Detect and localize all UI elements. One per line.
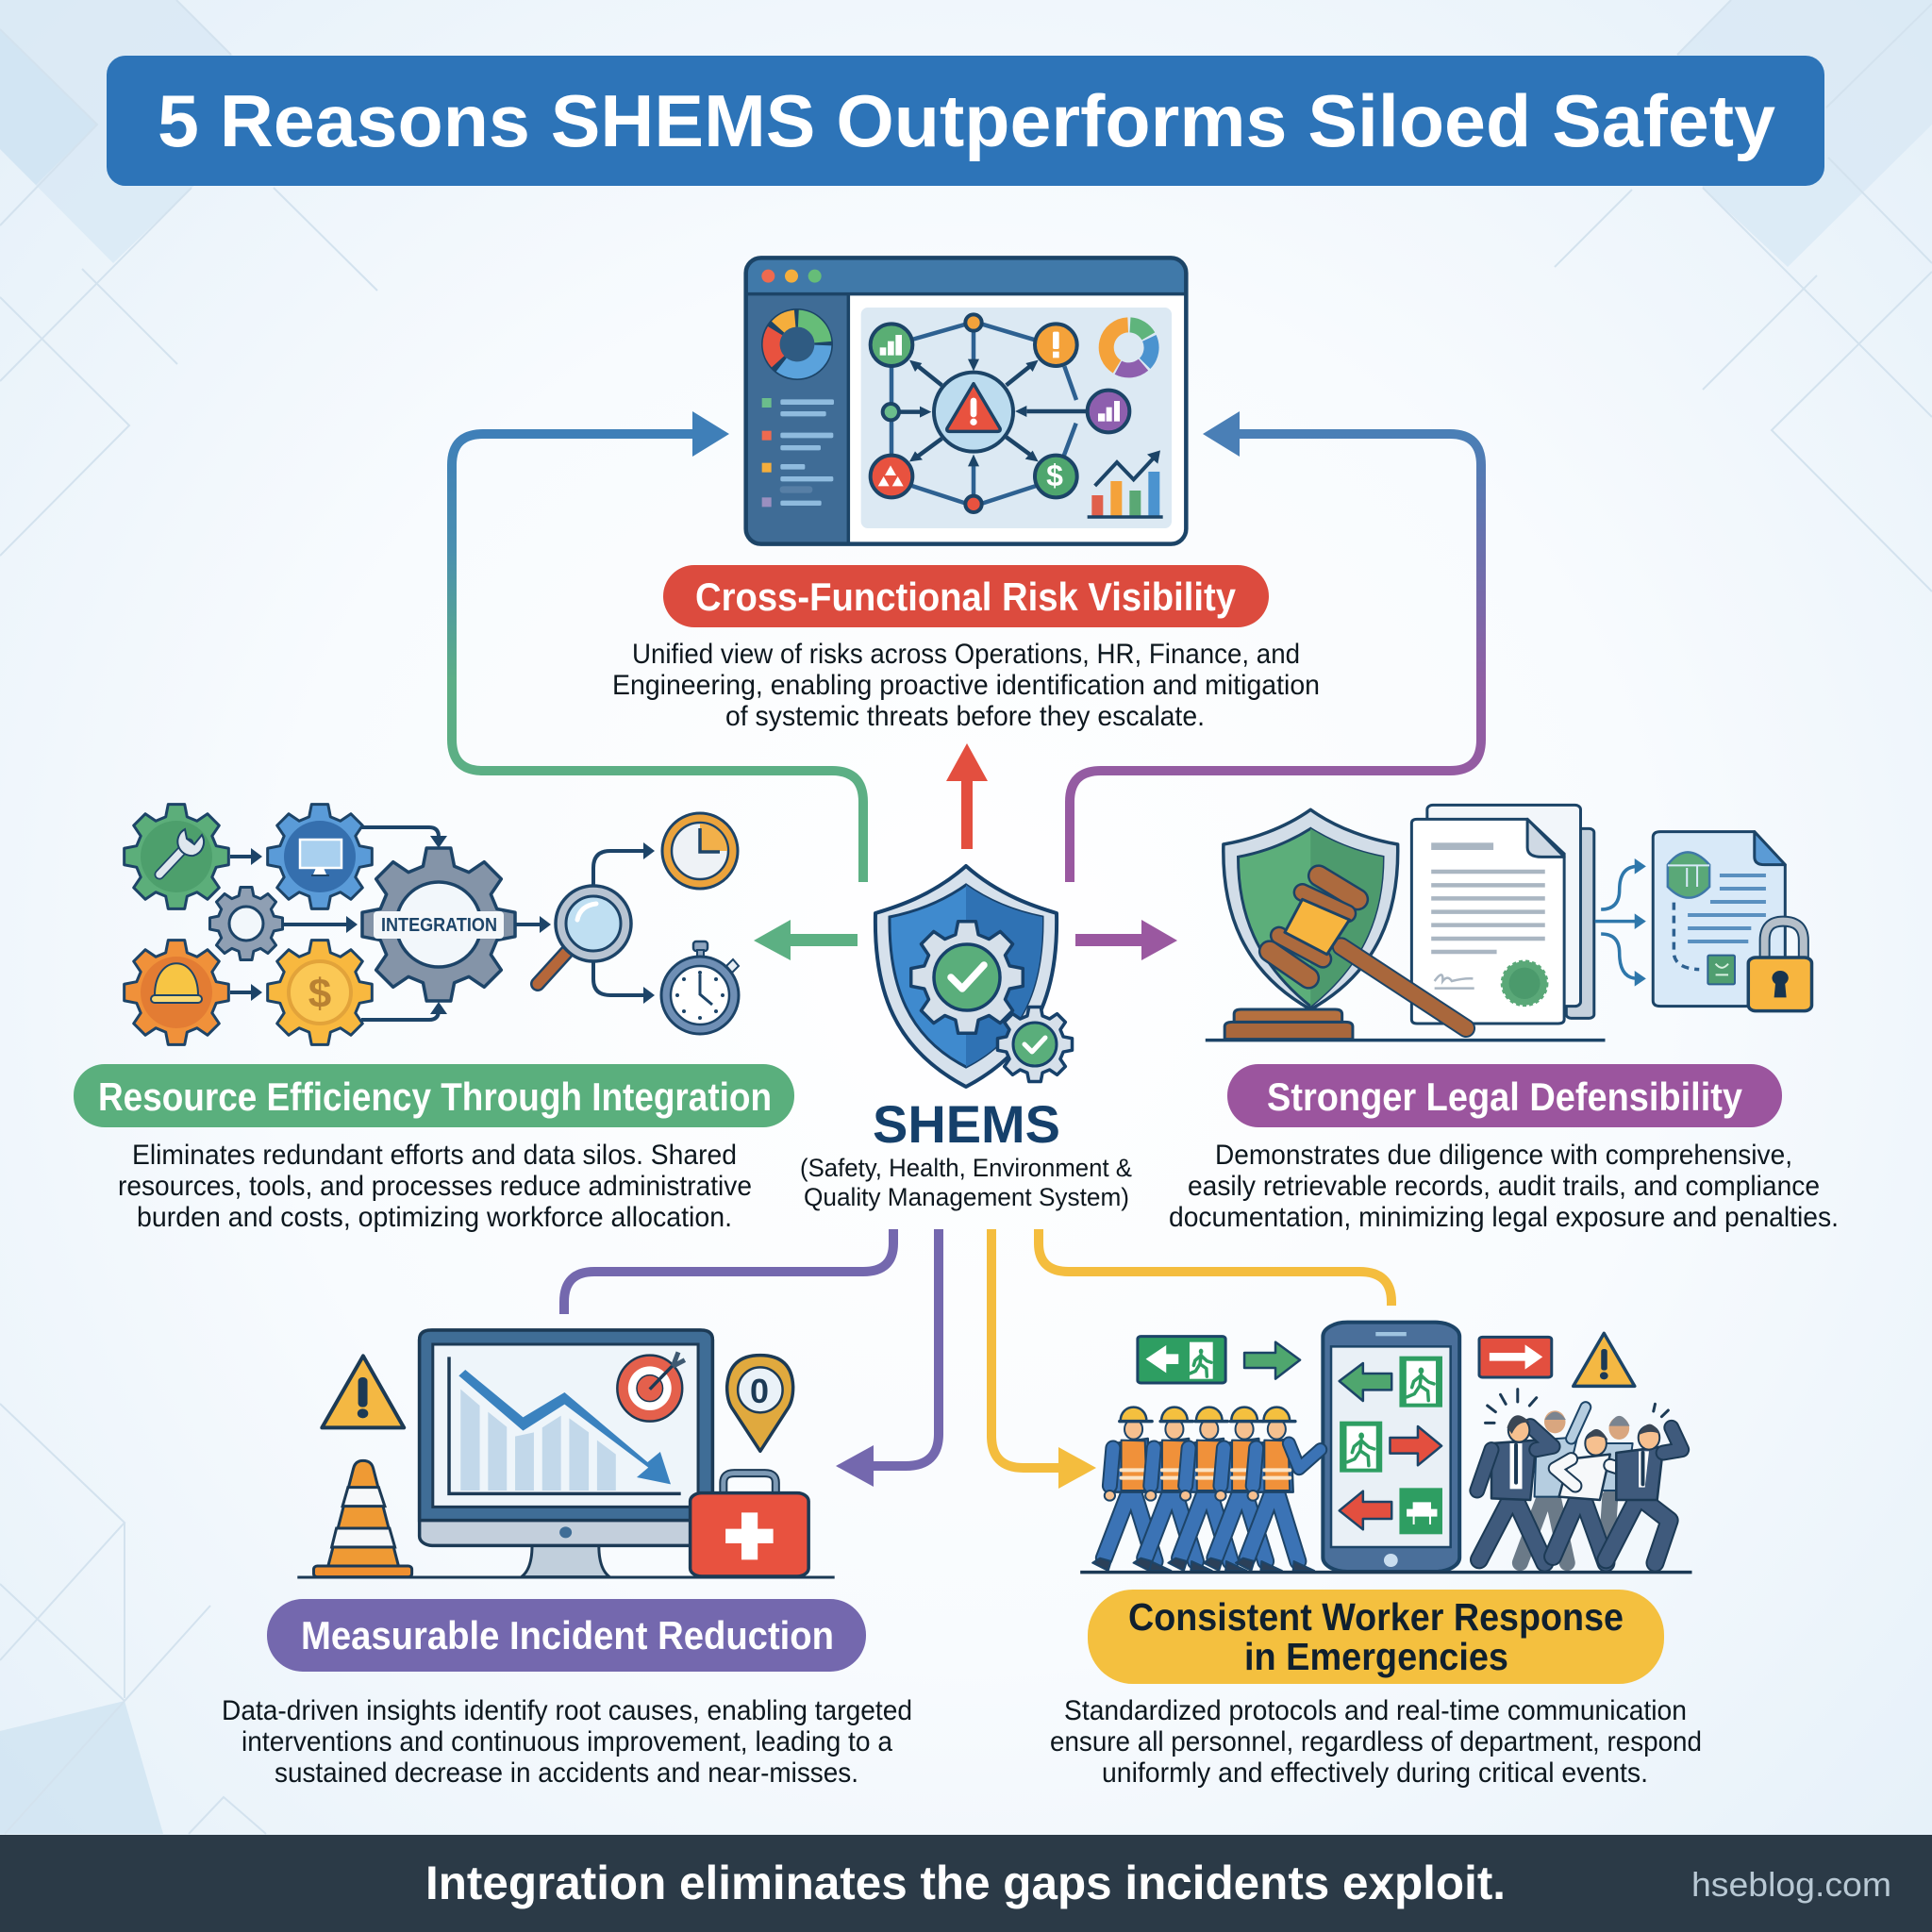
- text: SHEMS definition: (Safety, Health, Environment &: [800, 1154, 1132, 1182]
- chart: [449, 1357, 681, 1493]
- donut chart: [1107, 325, 1152, 370]
- text: risk visibility description: [612, 639, 1320, 732]
- text: risk visibility description: of systemic threats before they escalate.: [725, 701, 1205, 732]
- icon: resource integration gears: [125, 805, 739, 1044]
- magnifying glass: [538, 886, 631, 984]
- warning sign: [322, 1356, 404, 1427]
- warning triangle: [1574, 1333, 1635, 1386]
- heading pill: incident reduction: [267, 1599, 866, 1672]
- trend bar chart: [1088, 450, 1163, 517]
- secured document: [1653, 832, 1785, 1007]
- text: legal defensibility description: Demonstrates due diligence with comprehensive,: [1215, 1140, 1792, 1171]
- heading pill: legal defensibility: [1227, 1064, 1782, 1127]
- text: incident reduction description: sustained decrease in accidents and near-misses.: [275, 1757, 858, 1789]
- text: risk visibility description: Unified view of risks across Operations, HR, Finance, and: [632, 639, 1300, 670]
- orange helmet gear: [125, 941, 228, 1044]
- text: worker response description: uniformly and effectively during critical events.: [1102, 1757, 1648, 1789]
- title banner: [107, 56, 1824, 186]
- arrow: yellow to emergency response: [991, 1229, 1096, 1489]
- blue monitor gear: [268, 805, 372, 908]
- large integration gear: INTEGRATION: [381, 915, 497, 936]
- footer tagline: Integration eliminates the gaps incidents exploit.: [425, 1857, 1506, 1909]
- text: resource efficiency description: [118, 1140, 752, 1233]
- heading pill: incident reduction: Measurable Incident Reduction: [301, 1613, 834, 1657]
- text: incident reduction description: Data-driven insights identify root causes, enabling targeted: [222, 1695, 912, 1726]
- text: resource efficiency description: resources, tools, and processes reduce administrative: [118, 1171, 752, 1202]
- heading pill: risk visibility: Cross-Functional Risk Visibility: [695, 575, 1237, 619]
- arrow: green left: [754, 920, 858, 960]
- red arrow sign: [1479, 1337, 1552, 1377]
- background people: [1520, 1407, 1633, 1563]
- flow arrows: [230, 827, 645, 1020]
- small grey gear: [209, 887, 283, 960]
- text: legal defensibility description: [1169, 1140, 1839, 1233]
- risk network panel: [861, 308, 1172, 528]
- shield: [1224, 809, 1398, 1009]
- arrow: purple right: [1075, 920, 1177, 960]
- suit person one: [1477, 1415, 1553, 1563]
- text: worker response description: [1050, 1695, 1702, 1789]
- heading pill: worker response: in Emergencies: [1244, 1635, 1508, 1678]
- gavel: [1224, 875, 1466, 1040]
- yellow dollar gear: $: [308, 971, 331, 1017]
- text: incident reduction description: [222, 1695, 912, 1789]
- document stack: [1411, 805, 1594, 1024]
- target: [617, 1352, 685, 1422]
- padlock: [1765, 922, 1804, 959]
- arrow: indigo to incident illustration: [564, 1229, 893, 1314]
- footer website: hseblog.com: [1691, 1865, 1891, 1904]
- dollar sign in dashboard node: $: [1046, 458, 1063, 492]
- exit sign: [1138, 1337, 1225, 1383]
- zero label in pin: 0: [750, 1372, 769, 1410]
- icon: emergency response: [1080, 1323, 1692, 1573]
- traffic cone: [314, 1460, 412, 1577]
- icon: legal defensibility: [1206, 805, 1812, 1041]
- text: resource efficiency description: burden and costs, optimizing workforce allocation.: [137, 1202, 732, 1233]
- text: resource efficiency description: Eliminates redundant efforts and data silos. Shared: [132, 1140, 737, 1171]
- heading pill: worker response: Consistent Worker Response: [1128, 1595, 1624, 1639]
- location pin: [727, 1356, 793, 1451]
- footer bar: [0, 1835, 1932, 1932]
- heading pill: resource efficiency: [74, 1064, 794, 1127]
- arrow: purple connector to risk visibility: [1070, 411, 1481, 882]
- monitor: [420, 1330, 712, 1577]
- text: risk visibility description: Engineering, enabling proactive identification and mitigation: [612, 670, 1320, 701]
- text: SHEMS definition: [800, 1154, 1132, 1211]
- sidebar list: [762, 398, 834, 507]
- icon: dashboard: [746, 258, 1186, 544]
- text: SHEMS definition: Quality Management System): [804, 1183, 1129, 1211]
- orderly workers: [1092, 1407, 1321, 1571]
- heading pill: legal defensibility: Stronger Legal Defensibility: [1267, 1074, 1743, 1119]
- icon: incident reduction monitor: [297, 1330, 835, 1577]
- phone: [1323, 1323, 1459, 1572]
- text: legal defensibility description: easily retrievable records, audit trails, and compliance: [1188, 1171, 1820, 1202]
- large integration gear: [362, 848, 515, 1001]
- green wrench gear: [125, 805, 228, 908]
- clock: [662, 813, 738, 889]
- text: incident reduction description: interventions and continuous improvement, leading to a: [242, 1726, 892, 1757]
- heading pill: risk visibility: [663, 565, 1269, 627]
- text: worker response description: ensure all personnel, regardless of department, respond: [1050, 1726, 1702, 1757]
- title text: 5 Reasons SHEMS Outperforms Siloed Safety: [158, 79, 1775, 162]
- text: worker response description: Standardized protocols and real-time communication: [1064, 1695, 1687, 1726]
- icon: SHEMS shield: [875, 866, 1073, 1087]
- heading pill: worker response: [1088, 1590, 1664, 1684]
- text: legal defensibility description: documentation, minimizing legal exposure and penalties.: [1169, 1202, 1839, 1233]
- heading: SHEMS: SHEMS: [873, 1094, 1060, 1154]
- stopwatch: [661, 941, 739, 1034]
- arrow: yellow to phone illustration: [1039, 1229, 1391, 1306]
- arrow: green connector to risk visibility: [452, 411, 863, 882]
- arrow: red up: [946, 743, 988, 849]
- yellow dollar gear: [268, 941, 372, 1044]
- panicked staff: [1477, 1390, 1682, 1563]
- flow arrows: [1595, 866, 1638, 978]
- sidebar donut chart: [761, 308, 833, 380]
- first aid kit: [691, 1474, 808, 1576]
- arrow: indigo to incident reduction: [836, 1229, 939, 1487]
- suit person two: [1606, 1424, 1682, 1563]
- heading pill: resource efficiency: Resource Efficiency Through Integration: [98, 1074, 772, 1119]
- white shirt person: [1553, 1429, 1639, 1563]
- green arrow: [1244, 1342, 1300, 1379]
